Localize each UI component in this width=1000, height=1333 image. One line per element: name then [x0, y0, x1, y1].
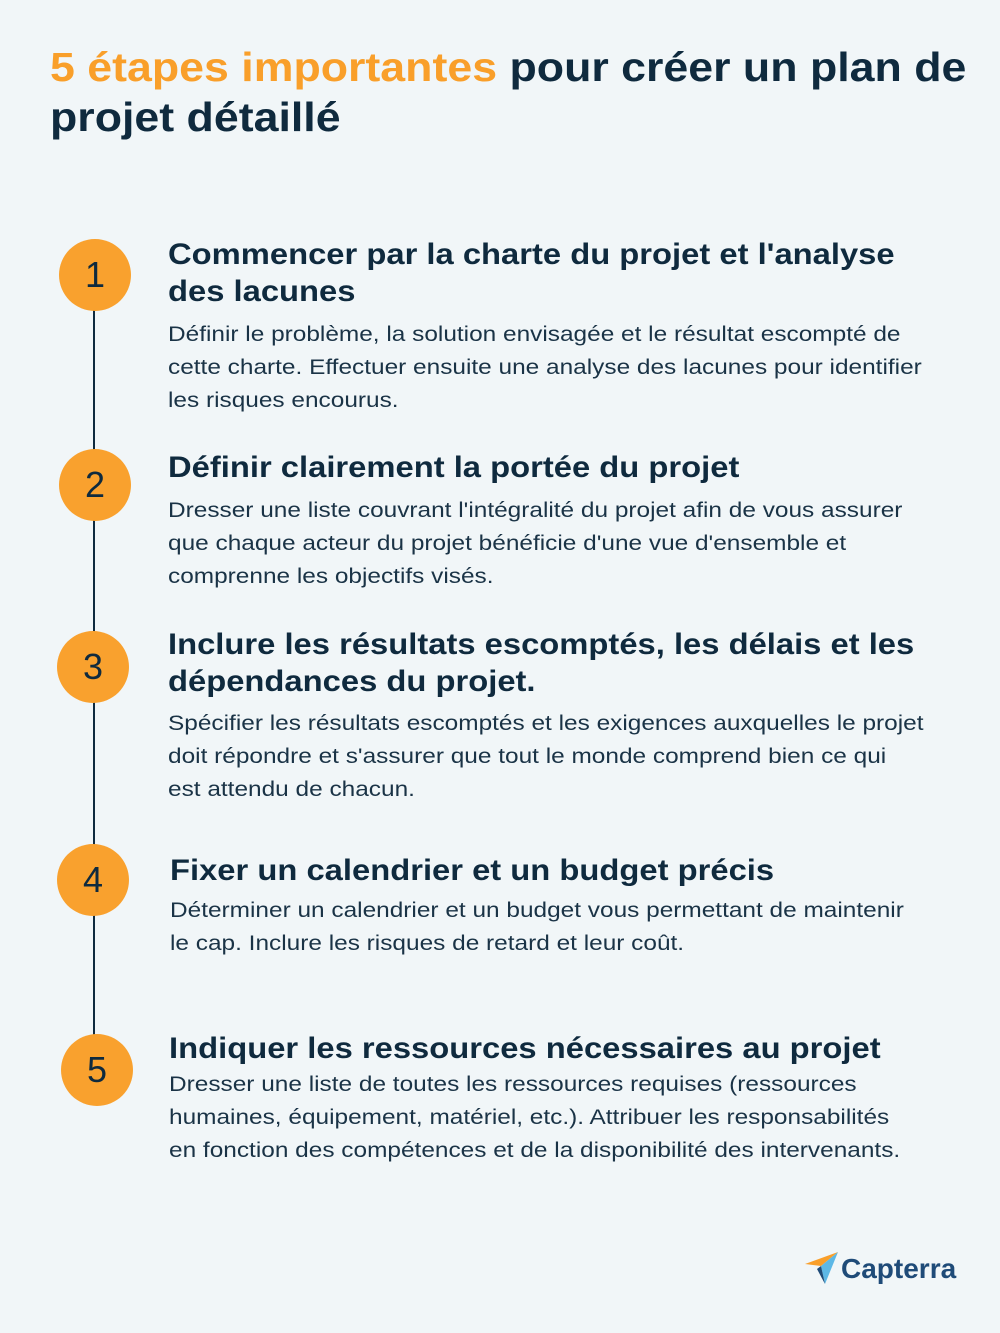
step 1 [59, 238, 922, 412]
title: projet détaillé [50, 94, 341, 140]
text 2: comprenne les objectifs visés. [168, 564, 494, 588]
text 2: Dresser une liste couvrant l'intégralité du projet afin de vous assurer [168, 498, 902, 522]
circle 3 [57, 631, 129, 703]
text 3 [168, 711, 924, 801]
heading 5: Indiquer les ressources nécessaires au projet [169, 1032, 881, 1065]
circle 1: 1 [85, 254, 105, 295]
text 1: Définir le problème, la solution envisagée et le résultat escompté de [168, 322, 900, 346]
text 2 [168, 498, 902, 588]
text 5 [169, 1072, 900, 1162]
circle 4 [57, 844, 129, 916]
title [50, 44, 966, 140]
text 1: les risques encourus. [168, 388, 399, 412]
heading 3: dépendances du projet. [168, 665, 536, 698]
heading 1: Commencer par la charte du projet et l'analyse [168, 238, 895, 271]
text 4: le cap. Inclure les risques de retard et leur coût. [170, 931, 684, 955]
text 4: Déterminer un calendrier et un budget vous permettant de maintenir [170, 898, 904, 922]
heading 3: Inclure les résultats escomptés, les délais et les [168, 628, 914, 661]
step 4 [57, 844, 904, 955]
icon: capterra arrow [805, 1252, 838, 1284]
circle 5 [61, 1034, 133, 1106]
step 5 [61, 1032, 900, 1162]
text 3: Spécifier les résultats escomptés et les exigences auxquelles le projet [168, 711, 924, 735]
circle 2: 2 [85, 464, 105, 505]
heading 1 [168, 238, 895, 308]
text 5: Dresser une liste de toutes les ressources requises (ressources [169, 1072, 857, 1096]
timeline line [93, 275, 95, 1070]
heading 4: Fixer un calendrier et un budget précis [170, 854, 774, 887]
circle 4: 4 [83, 859, 103, 900]
text 1 [168, 322, 922, 412]
step 3 [57, 628, 924, 801]
heading 1: des lacunes [168, 275, 355, 308]
logo text: Capterra [841, 1253, 956, 1284]
text 1: cette charte. Effectuer ensuite une analyse des lacunes pour identifier [168, 355, 922, 379]
text 2: que chaque acteur du projet bénéficie d'une vue d'ensemble et [168, 531, 846, 555]
circle 5: 5 [87, 1049, 107, 1090]
circle 3: 3 [83, 646, 103, 687]
logo: Capterra [805, 1252, 956, 1284]
title: 5 étapes importantes pour créer un plan de [50, 44, 966, 90]
text 5: humaines, équipement, matériel, etc.). Attribuer les responsabilités [169, 1105, 889, 1129]
step 2 [59, 449, 902, 588]
text 3: est attendu de chacun. [168, 777, 415, 801]
circle 2 [59, 449, 131, 521]
text 5: en fonction des compétences et de la disponibilité des intervenants. [169, 1138, 900, 1162]
heading 2: Définir clairement la portée du projet [168, 451, 739, 484]
circle 1 [59, 239, 131, 311]
heading 3 [168, 628, 914, 698]
text 3: doit répondre et s'assurer que tout le monde comprend bien ce qui [168, 744, 886, 768]
text 4 [170, 898, 904, 955]
